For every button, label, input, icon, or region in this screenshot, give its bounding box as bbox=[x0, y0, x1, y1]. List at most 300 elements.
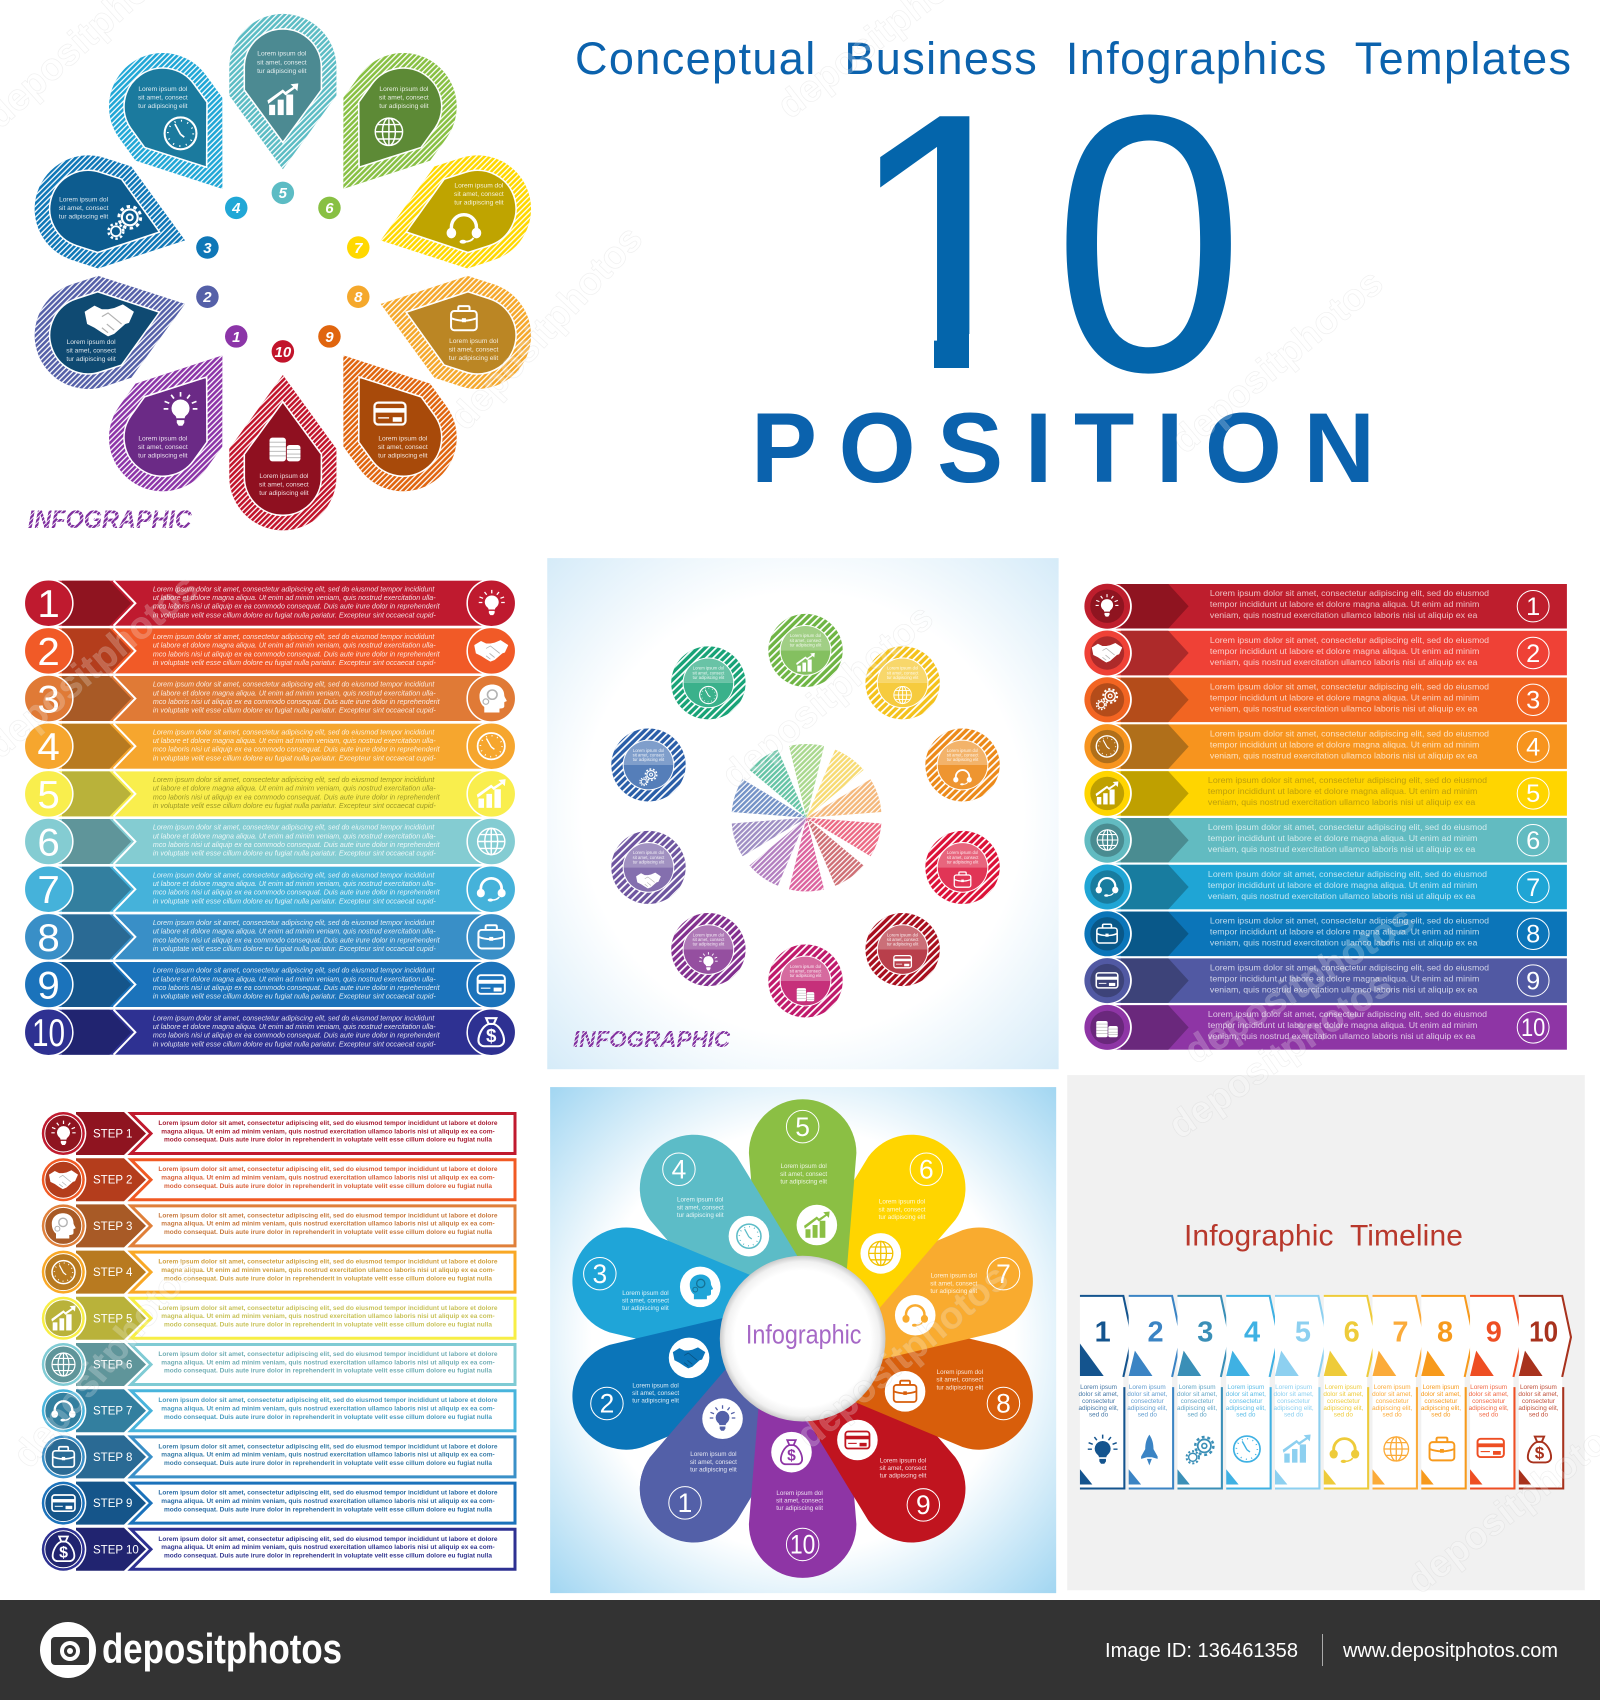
step 3: magna aliqua. Ut enim ad minim veniam, quis nostrud exercitation ullamco laboris nisi ut aliquip ex ea com- bbox=[161, 1221, 495, 1228]
label INFOGRAPHIC: INFOGRAPHIC bbox=[28, 507, 193, 534]
column 5: 5 bbox=[1295, 1317, 1311, 1348]
column 7: dolor sit amet, bbox=[1372, 1391, 1412, 1398]
column 1: dolor sit amet, bbox=[1078, 1391, 1119, 1398]
circle: dark red card: sit amet, consect bbox=[887, 937, 919, 942]
column 8: 8 bbox=[1437, 1317, 1453, 1348]
row 2: veniam, quis nostrud exercitation ullamco laboris nisi ut aliquip ex ea bbox=[1210, 657, 1477, 667]
row 8: veniam, quis nostrud exercitation ullamco laboris nisi ut aliquip ex ea bbox=[1210, 938, 1477, 948]
step 4: magna aliqua. Ut enim ad minim veniam, quis nostrud exercitation ullamco laboris nisi ut aliquip ex ea com- bbox=[161, 1267, 495, 1274]
step 5 bbox=[40, 1295, 515, 1341]
petal text blocks: Lorem ipsum dol bbox=[880, 1457, 926, 1464]
step 5: modo consequat. Duis aute irure dolor in reprehenderit in voluptate velit esse cillum dolore eu fugiat nulla bbox=[164, 1322, 492, 1329]
row 3 bbox=[1084, 676, 1567, 723]
row 3: Lorem ipsum dolor sit amet, consectetur adipiscing elit, sed do eiusmod tempor incididunt bbox=[153, 682, 435, 689]
number labels: 4 bbox=[672, 1154, 686, 1184]
petal 2: Lorem ipsum dol bbox=[67, 339, 116, 346]
row 4: in voluptate velit esse cillum dolore eu fugiat nulla pariatur. Excepteur sint occaecat cupid- bbox=[153, 755, 436, 762]
step 8 bbox=[40, 1434, 515, 1480]
row 4: mco laboris nisi ut aliquip ex ea commodo consequat. Duis aute irure dolor in reprehenderit bbox=[153, 747, 441, 754]
column 10: dolor sit amet, bbox=[1518, 1391, 1559, 1398]
step 6: STEP 6 bbox=[93, 1360, 132, 1372]
row 1: 1 bbox=[37, 583, 60, 626]
panel: big petal flower bbox=[550, 1087, 1056, 1593]
column 2: adipiscing elit, bbox=[1127, 1405, 1168, 1412]
row 7: Lorem ipsum dolor sit amet, consectetur adipiscing elit, sed do eiusmod tempor incididunt bbox=[153, 872, 435, 879]
number labels: 2 bbox=[600, 1389, 614, 1419]
row 10: 10 bbox=[1521, 1014, 1545, 1042]
step 6: Lorem ipsum dolor sit amet, consectetur adipiscing elit, sed do eiusmod tempor incididunt ut labore et dolore bbox=[158, 1351, 498, 1358]
panel: teardrop flower bbox=[21, 14, 545, 534]
column 10: sed do bbox=[1529, 1412, 1549, 1419]
row 5: Lorem ipsum dolor sit amet, consectetur adipiscing elit, sed do eiusmod bbox=[1208, 775, 1487, 785]
watermarks: depositphotos bbox=[714, 596, 941, 797]
petal 2: sit amet, consect bbox=[66, 347, 116, 354]
petal 9: tur adipiscing elit bbox=[378, 452, 428, 459]
petal 1: tur adipiscing elit bbox=[138, 452, 188, 459]
step 1 bbox=[40, 1110, 515, 1156]
column 6: sed do bbox=[1334, 1412, 1353, 1419]
column 9: 9 bbox=[1486, 1317, 1502, 1348]
petal 4: Lorem ipsum dol bbox=[138, 86, 188, 93]
step 5: STEP 5 bbox=[93, 1313, 132, 1325]
column 3 bbox=[1177, 1295, 1230, 1490]
row 4: tempor incididunt ut labore et dolore magna aliqua. Ut enim ad minim bbox=[1210, 739, 1479, 749]
column 4: consectetur bbox=[1229, 1398, 1262, 1405]
row 3: ut labore et dolore magna aliqua. Ut enim ad minim veniam, quis nostrud exercitation ulla- bbox=[153, 690, 436, 697]
row 1 bbox=[24, 580, 516, 627]
number badges: 2 bbox=[202, 289, 212, 306]
column 3: adipiscing elit, bbox=[1177, 1405, 1217, 1412]
row 3: in voluptate velit esse cillum dolore eu fugiat nulla pariatur. Excepteur sint occaecat cupid- bbox=[153, 708, 436, 715]
circle: green clock: Lorem ipsum dol bbox=[693, 666, 724, 671]
row 1: veniam, quis nostrud exercitation ullamco laboris nisi ut aliquip ex ea bbox=[1210, 610, 1477, 620]
petal text blocks: Lorem ipsum dol bbox=[690, 1451, 737, 1458]
column 3: consectetur bbox=[1181, 1398, 1214, 1405]
column 7 bbox=[1372, 1295, 1425, 1490]
row 5: 5 bbox=[1526, 780, 1540, 808]
petal text blocks: sit amet, consect bbox=[930, 1280, 978, 1287]
row 10: tempor incididunt ut labore et dolore magna aliqua. Ut enim ad minim bbox=[1208, 1020, 1477, 1030]
panel: step list bbox=[40, 1110, 515, 1572]
row 3: mco laboris nisi ut aliquip ex ea commodo consequat. Duis aute irure dolor in reprehenderit bbox=[153, 699, 441, 706]
row 1: tempor incididunt ut labore et dolore magna aliqua. Ut enim ad minim bbox=[1210, 599, 1479, 609]
petal text blocks: tur adipiscing elit bbox=[632, 1397, 679, 1404]
column 8: adipiscing elit, bbox=[1421, 1405, 1461, 1412]
row 8: mco laboris nisi ut aliquip ex ea commodo consequat. Duis aute irure dolor in reprehenderit bbox=[153, 937, 441, 944]
step 6: magna aliqua. Ut enim ad minim veniam, quis nostrud exercitation ullamco laboris nisi ut aliquip ex ea com- bbox=[161, 1359, 495, 1366]
petal text blocks: tur adipiscing elit bbox=[690, 1466, 737, 1473]
column 2: Lorem ipsum bbox=[1129, 1384, 1166, 1391]
petal text blocks: tur adipiscing elit bbox=[622, 1305, 669, 1312]
column 5: sed do bbox=[1284, 1412, 1304, 1419]
watermarks: depositphotos bbox=[5, 1248, 205, 1476]
number badges bbox=[196, 182, 370, 363]
step 9: magna aliqua. Ut enim ad minim veniam, quis nostrud exercitation ullamco laboris nisi ut aliquip ex ea com- bbox=[161, 1498, 495, 1505]
petal 10: sit amet, consect bbox=[259, 481, 309, 488]
column 7: adipiscing elit, bbox=[1372, 1405, 1412, 1412]
icon: bulb bbox=[702, 1398, 743, 1439]
column 10: consectetur bbox=[1522, 1398, 1555, 1405]
petal 1: sit amet, consect bbox=[138, 444, 188, 451]
watermarks: depositphotos bbox=[789, 1256, 1016, 1457]
column 6: dolor sit amet, bbox=[1323, 1391, 1364, 1398]
row 8: tempor incididunt ut labore et dolore magna aliqua. Ut enim ad minim bbox=[1210, 927, 1479, 937]
row 9: ut labore et dolore magna aliqua. Ut enim ad minim veniam, quis nostrud exercitation ulla- bbox=[153, 976, 436, 983]
column 9: Lorem ipsum bbox=[1470, 1384, 1507, 1391]
icon: globe bbox=[860, 1233, 901, 1274]
petal text blocks: tur adipiscing elit bbox=[776, 1505, 823, 1512]
circle: red briefcase bbox=[925, 831, 1000, 904]
column 8: Lorem ipsum bbox=[1422, 1384, 1459, 1391]
number labels: 1 bbox=[678, 1488, 692, 1518]
row 9: 9 bbox=[1526, 968, 1540, 995]
row 4: 4 bbox=[37, 726, 60, 769]
row 9: tempor incididunt ut labore et dolore magna aliqua. Ut enim ad minim bbox=[1210, 973, 1479, 983]
step 3: modo consequat. Duis aute irure dolor in reprehenderit in voluptate velit esse cillum dolore eu fugiat nulla bbox=[164, 1229, 492, 1236]
step 10: modo consequat. Duis aute irure dolor in reprehenderit in voluptate velit esse cillum dolore eu fugiat nulla bbox=[164, 1553, 492, 1560]
step 9: STEP 9 bbox=[93, 1498, 132, 1510]
petal 9 bbox=[300, 324, 478, 513]
icon: briefcase bbox=[885, 1371, 925, 1412]
step 2: modo consequat. Duis aute irure dolor in reprehenderit in voluptate velit esse cillum dolore eu fugiat nulla bbox=[164, 1183, 492, 1190]
column 10: 10 bbox=[1529, 1317, 1558, 1348]
row 6: in voluptate velit esse cillum dolore eu fugiat nulla pariatur. Excepteur sint occaecat cupid- bbox=[153, 851, 436, 858]
row 6: veniam, quis nostrud exercitation ullamco laboris nisi ut aliquip ex ea bbox=[1208, 844, 1475, 854]
row 6: Lorem ipsum dolor sit amet, consectetur adipiscing elit, sed do eiusmod bbox=[1208, 822, 1487, 832]
petal 6: sit amet, consect bbox=[379, 95, 429, 102]
row 10: ut labore et dolore magna aliqua. Ut enim ad minim veniam, quis nostrud exercitation ulla- bbox=[153, 1024, 436, 1031]
step 6 bbox=[40, 1342, 515, 1388]
number badges: 4 bbox=[231, 200, 241, 217]
circle: yellow globe bbox=[865, 646, 940, 719]
circle: yellow globe: tur adipiscing elit bbox=[887, 675, 919, 680]
circle: green chart: tur adipiscing elit bbox=[790, 643, 822, 648]
row 9: Lorem ipsum dolor sit amet, consectetur adipiscing elit, sed do eiusmod tempor incididunt bbox=[153, 968, 435, 975]
column 10 bbox=[1518, 1295, 1571, 1490]
row 2: in voluptate velit esse cillum dolore eu fugiat nulla pariatur. Excepteur sint occaecat cupid- bbox=[153, 660, 436, 667]
row 5: veniam, quis nostrud exercitation ullamco laboris nisi ut aliquip ex ea bbox=[1208, 797, 1475, 807]
step 8: modo consequat. Duis aute irure dolor in reprehenderit in voluptate velit esse cillum dolore eu fugiat nulla bbox=[164, 1460, 492, 1467]
row 5: tempor incididunt ut labore et dolore magna aliqua. Ut enim ad minim bbox=[1208, 786, 1477, 796]
row 7: in voluptate velit esse cillum dolore eu fugiat nulla pariatur. Excepteur sint occaecat cupid- bbox=[153, 898, 436, 905]
watermarks: depositphotos bbox=[442, 218, 651, 438]
row 1: Lorem ipsum dolor sit amet, consectetur adipiscing elit, sed do eiusmod bbox=[1210, 588, 1489, 598]
icon: handshake bbox=[669, 1338, 709, 1378]
circle: green chart: sit amet, consect bbox=[790, 638, 822, 643]
step 4: Lorem ipsum dolor sit amet, consectetur adipiscing elit, sed do eiusmod tempor incididunt ut labore et dolore bbox=[158, 1259, 498, 1266]
row 8 bbox=[1084, 910, 1567, 957]
row 2: Lorem ipsum dolor sit amet, consectetur adipiscing elit, sed do eiusmod bbox=[1210, 635, 1489, 645]
row 6 bbox=[1084, 817, 1567, 864]
row 4 bbox=[1084, 723, 1567, 770]
column 2 bbox=[1127, 1295, 1181, 1490]
row 4: Lorem ipsum dolor sit amet, consectetur adipiscing elit, sed do eiusmod bbox=[1210, 728, 1489, 738]
step 10: magna aliqua. Ut enim ad minim veniam, quis nostrud exercitation ullamco laboris nisi ut aliquip ex ea com- bbox=[161, 1544, 495, 1551]
circle: yellow globe: sit amet, consect bbox=[887, 670, 919, 675]
row 8: ut labore et dolore magna aliqua. Ut enim ad minim veniam, quis nostrud exercitation ulla- bbox=[153, 929, 436, 936]
column 4: Lorem ipsum bbox=[1227, 1384, 1264, 1391]
column 1: adipiscing elit, bbox=[1078, 1405, 1119, 1412]
column 1: 1 bbox=[1095, 1317, 1111, 1348]
petal text blocks bbox=[622, 1163, 984, 1512]
row 4 bbox=[24, 723, 516, 770]
row 8: 8 bbox=[37, 916, 60, 960]
column 8 bbox=[1421, 1295, 1474, 1490]
centre hub: Infographic bbox=[746, 1320, 861, 1350]
circle: blue gears: Lorem ipsum dol bbox=[633, 748, 664, 753]
circle: dark red card: tur adipiscing elit bbox=[887, 942, 919, 947]
watermarks: depositphotos bbox=[1178, 898, 1422, 1073]
row 4: veniam, quis nostrud exercitation ullamco laboris nisi ut aliquip ex ea bbox=[1210, 750, 1477, 760]
row 5 bbox=[24, 770, 516, 817]
row 10: in voluptate velit esse cillum dolore eu fugiat nulla pariatur. Excepteur sint occaecat cupid- bbox=[153, 1041, 436, 1048]
circle: red briefcase: Lorem ipsum dol bbox=[947, 850, 978, 855]
footer bar bbox=[0, 1600, 1600, 1700]
petal 7 bbox=[364, 141, 545, 291]
column 1: consectetur bbox=[1082, 1398, 1115, 1405]
circle: green chart: Lorem ipsum dol bbox=[790, 633, 821, 638]
row 3: veniam, quis nostrud exercitation ullamco laboris nisi ut aliquip ex ea bbox=[1210, 704, 1477, 714]
column 5: Lorem ipsum bbox=[1275, 1384, 1312, 1391]
column 10: adipiscing elit, bbox=[1518, 1405, 1559, 1412]
step 6: modo consequat. Duis aute irure dolor in reprehenderit in voluptate velit esse cillum dolore eu fugiat nulla bbox=[164, 1368, 492, 1375]
circle: violet handshake: sit amet, consect bbox=[633, 855, 665, 860]
row 7: Lorem ipsum dolor sit amet, consectetur adipiscing elit, sed do eiusmod bbox=[1208, 869, 1487, 879]
circle: dark red card: Lorem ipsum dol bbox=[887, 932, 918, 937]
step 7: modo consequat. Duis aute irure dolor in reprehenderit in voluptate velit esse cillum dolore eu fugiat nulla bbox=[164, 1414, 492, 1421]
petal 7: tur adipiscing elit bbox=[454, 200, 504, 207]
petal 6: tur adipiscing elit bbox=[379, 103, 429, 110]
row 9: mco laboris nisi ut aliquip ex ea commodo consequat. Duis aute irure dolor in reprehenderit bbox=[153, 985, 441, 992]
circle: blue gears bbox=[611, 728, 686, 801]
number badges: 5 bbox=[279, 185, 288, 202]
petals bbox=[558, 1099, 1047, 1578]
step 3: STEP 3 bbox=[93, 1221, 132, 1233]
watermarks: depositphotos bbox=[1164, 261, 1391, 462]
circle: orange headset: Lorem ipsum dol bbox=[947, 748, 978, 753]
row 4: ut labore et dolore magna aliqua. Ut enim ad minim veniam, quis nostrud exercitation ulla- bbox=[153, 738, 436, 745]
column 6 bbox=[1323, 1295, 1376, 1490]
row 8: Lorem ipsum dolor sit amet, consectetur adipiscing elit, sed do eiusmod bbox=[1210, 916, 1489, 926]
step 10: STEP 10 bbox=[93, 1544, 139, 1556]
circle: magenta coins: sit amet, consect bbox=[790, 969, 822, 973]
step 7: magna aliqua. Ut enim ad minim veniam, quis nostrud exercitation ullamco laboris nisi ut aliquip ex ea com- bbox=[161, 1405, 495, 1412]
watermarks: depositphotos bbox=[1161, 963, 1400, 1147]
number badges: 6 bbox=[325, 200, 334, 217]
number labels bbox=[592, 1112, 1011, 1560]
row 5: ut labore et dolore magna aliqua. Ut enim ad minim veniam, quis nostrud exercitation ulla- bbox=[153, 786, 436, 793]
column 3: dolor sit amet, bbox=[1177, 1391, 1217, 1398]
icon: clock bbox=[729, 1216, 769, 1256]
circle: purple bulb: tur adipiscing elit bbox=[693, 942, 725, 947]
circle: violet handshake: Lorem ipsum dol bbox=[633, 850, 664, 855]
step 10 bbox=[40, 1526, 515, 1572]
petal 4: tur adipiscing elit bbox=[138, 103, 188, 110]
column 6: adipiscing elit, bbox=[1323, 1405, 1364, 1412]
step 9 bbox=[40, 1480, 515, 1526]
row 1: in voluptate velit esse cillum dolore eu fugiat nulla pariatur. Excepteur sint occaecat cupid- bbox=[153, 612, 436, 619]
row 2 bbox=[1084, 630, 1567, 676]
row 6: ut labore et dolore magna aliqua. Ut enim ad minim veniam, quis nostrud exercitation ulla- bbox=[153, 833, 436, 840]
petal text blocks: sit amet, consect bbox=[776, 1497, 823, 1504]
timeline title: Infographic Timeline bbox=[1184, 1220, 1463, 1252]
row 3: 3 bbox=[1526, 687, 1540, 715]
website: www.depositphotos.com bbox=[1342, 1640, 1558, 1662]
row 7: 7 bbox=[1526, 874, 1540, 902]
circle: green clock: sit amet, consect bbox=[693, 670, 725, 675]
row 6: Lorem ipsum dolor sit amet, consectetur adipiscing elit, sed do eiusmod tempor incididunt bbox=[153, 825, 435, 832]
number labels: 8 bbox=[996, 1389, 1011, 1419]
number badges: 10 bbox=[275, 344, 292, 361]
step 5: Lorem ipsum dolor sit amet, consectetur adipiscing elit, sed do eiusmod tempor incididunt ut labore et dolore bbox=[158, 1305, 498, 1312]
petal numbers bbox=[584, 1110, 1020, 1561]
column 8: sed do bbox=[1431, 1412, 1451, 1419]
column 9: dolor sit amet, bbox=[1469, 1391, 1509, 1398]
petal text blocks: Lorem ipsum dol bbox=[776, 1490, 823, 1497]
petal text blocks: sit amet, consect bbox=[632, 1390, 679, 1397]
column 6: Lorem ipsum bbox=[1325, 1384, 1362, 1391]
number labels: 9 bbox=[916, 1490, 931, 1520]
petal 9: Lorem ipsum dol bbox=[378, 435, 428, 442]
row 2: Lorem ipsum dolor sit amet, consectetur adipiscing elit, sed do eiusmod tempor incididunt bbox=[153, 634, 435, 641]
petal 3: Lorem ipsum dol bbox=[59, 196, 109, 203]
circle: green chart bbox=[768, 614, 843, 687]
column 9: consectetur bbox=[1472, 1398, 1505, 1405]
icon: chart bbox=[797, 1205, 837, 1245]
row 2 bbox=[24, 627, 516, 674]
column 5: dolor sit amet, bbox=[1274, 1391, 1314, 1398]
row 6: mco laboris nisi ut aliquip ex ea commodo consequat. Duis aute irure dolor in reprehenderit bbox=[153, 842, 441, 849]
row 2: 2 bbox=[1526, 640, 1540, 668]
step 3: Lorem ipsum dolor sit amet, consectetur adipiscing elit, sed do eiusmod tempor incididunt ut labore et dolore bbox=[158, 1212, 498, 1219]
row 7 bbox=[24, 866, 516, 913]
petal 7: sit amet, consect bbox=[454, 191, 504, 198]
petal text blocks: tur adipiscing elit bbox=[879, 1214, 926, 1221]
column 3: Lorem ipsum bbox=[1179, 1384, 1216, 1391]
circle: magenta coins: tur adipiscing elit bbox=[790, 973, 822, 978]
number badges: 3 bbox=[203, 240, 212, 257]
step 7: STEP 7 bbox=[93, 1406, 132, 1418]
logo text: depositphotos bbox=[102, 1625, 342, 1672]
row 1: mco laboris nisi ut aliquip ex ea commodo consequat. Duis aute irure dolor in reprehenderit bbox=[153, 604, 441, 611]
circle: orange headset bbox=[925, 728, 1000, 801]
row 9: in voluptate velit esse cillum dolore eu fugiat nulla pariatur. Excepteur sint occaecat cupid- bbox=[153, 994, 436, 1001]
row 2: mco laboris nisi ut aliquip ex ea commodo consequat. Duis aute irure dolor in reprehenderit bbox=[153, 651, 441, 658]
petal 2: tur adipiscing elit bbox=[66, 356, 116, 363]
step 1: magna aliqua. Ut enim ad minim veniam, quis nostrud exercitation ullamco laboris nisi ut aliquip ex ea com- bbox=[161, 1128, 495, 1135]
petal 4 bbox=[88, 32, 266, 220]
circle: blue gears: sit amet, consect bbox=[633, 753, 665, 757]
petal 1 bbox=[88, 324, 266, 513]
circle: orange headset: sit amet, consect bbox=[947, 753, 979, 757]
petal 5 bbox=[229, 14, 336, 169]
column 5: adipiscing elit, bbox=[1274, 1405, 1314, 1412]
step 2 bbox=[40, 1157, 515, 1203]
circle: violet handshake: tur adipiscing elit bbox=[633, 860, 665, 865]
column 9 bbox=[1469, 1295, 1523, 1490]
centre hub bbox=[720, 1256, 886, 1421]
petal text blocks: Lorem ipsum dol bbox=[677, 1197, 723, 1204]
step 4 bbox=[40, 1249, 515, 1295]
circle: purple bulb: Lorem ipsum dol bbox=[693, 932, 724, 937]
petal 5: Lorem ipsum dol bbox=[257, 51, 307, 58]
striped pie chart bbox=[730, 744, 883, 891]
row 5: Lorem ipsum dolor sit amet, consectetur adipiscing elit, sed do eiusmod tempor incididunt bbox=[153, 777, 435, 784]
row 9 bbox=[1084, 957, 1567, 1004]
petal 8: Lorem ipsum dol bbox=[449, 338, 499, 345]
petal text blocks: Lorem ipsum dol bbox=[622, 1290, 669, 1297]
petal 8: sit amet, consect bbox=[449, 346, 499, 353]
row 6: 6 bbox=[1526, 827, 1540, 855]
number badges: 1 bbox=[232, 329, 240, 346]
petal 10: Lorem ipsum dol bbox=[259, 473, 309, 480]
row 9: veniam, quis nostrud exercitation ullamco laboris nisi ut aliquip ex ea bbox=[1210, 984, 1477, 994]
step 4: STEP 4 bbox=[93, 1267, 133, 1279]
circle: blue gears: tur adipiscing elit bbox=[633, 757, 665, 762]
big number 10: 0 bbox=[1053, 39, 1244, 448]
petal text blocks: Lorem ipsum dol bbox=[632, 1382, 679, 1389]
row 1: 1 bbox=[1526, 593, 1540, 621]
petal text blocks: tur adipiscing elit bbox=[937, 1384, 983, 1391]
step 1: modo consequat. Duis aute irure dolor in reprehenderit in voluptate velit esse cillum dolore eu fugiat nulla bbox=[164, 1137, 492, 1144]
petal 1: Lorem ipsum dol bbox=[138, 435, 188, 442]
row 2: ut labore et dolore magna aliqua. Ut enim ad minim veniam, quis nostrud exercitation ulla- bbox=[153, 643, 436, 650]
petal text blocks: sit amet, consect bbox=[880, 1465, 927, 1472]
row 1: ut labore et dolore magna aliqua. Ut enim ad minim veniam, quis nostrud exercitation ulla- bbox=[153, 595, 436, 602]
petal 5: tur adipiscing elit bbox=[257, 68, 307, 75]
row 3: tempor incididunt ut labore et dolore magna aliqua. Ut enim ad minim bbox=[1210, 693, 1479, 703]
circle: purple bulb: sit amet, consect bbox=[693, 937, 725, 942]
row 9: 9 bbox=[37, 964, 60, 1007]
circle: purple bulb bbox=[671, 913, 746, 986]
column 3: sed do bbox=[1188, 1412, 1207, 1419]
icon: head bbox=[680, 1267, 721, 1307]
column 2: dolor sit amet, bbox=[1127, 1391, 1168, 1398]
petal 7: Lorem ipsum dol bbox=[454, 182, 504, 189]
column 8: consectetur bbox=[1424, 1398, 1457, 1405]
petal text blocks: tur adipiscing elit bbox=[880, 1473, 927, 1480]
circle: magenta coins bbox=[768, 944, 843, 1018]
panel: numbered list with right icons bbox=[24, 580, 516, 1056]
column 5 bbox=[1274, 1295, 1328, 1490]
step 1: Lorem ipsum dolor sit amet, consectetur adipiscing elit, sed do eiusmod tempor incididunt ut labore et dolore bbox=[158, 1120, 498, 1127]
petal text blocks: Lorem ipsum dol bbox=[937, 1369, 983, 1376]
petal 3: sit amet, consect bbox=[59, 205, 109, 212]
petal text blocks: Lorem ipsum dol bbox=[931, 1273, 977, 1280]
column 6: consectetur bbox=[1327, 1398, 1360, 1405]
step 5: magna aliqua. Ut enim ad minim veniam, quis nostrud exercitation ullamco laboris nisi ut aliquip ex ea com- bbox=[161, 1313, 495, 1320]
circle: magenta coins: Lorem ipsum dol bbox=[790, 964, 821, 969]
number labels: 5 bbox=[795, 1112, 810, 1142]
row 8: in voluptate velit esse cillum dolore eu fugiat nulla pariatur. Excepteur sint occaecat cupid- bbox=[153, 946, 436, 953]
column 2: 2 bbox=[1148, 1317, 1164, 1348]
circle: yellow globe: Lorem ipsum dol bbox=[887, 666, 918, 671]
column 3: 3 bbox=[1197, 1317, 1213, 1348]
petal 8 bbox=[364, 253, 545, 403]
column 8: dolor sit amet, bbox=[1421, 1391, 1461, 1398]
row 6: tempor incididunt ut labore et dolore magna aliqua. Ut enim ad minim bbox=[1208, 833, 1477, 843]
column 6: 6 bbox=[1344, 1317, 1360, 1348]
row 5: 5 bbox=[37, 773, 60, 817]
row 10: Lorem ipsum dolor sit amet, consectetur adipiscing elit, sed do eiusmod tempor incididunt bbox=[153, 1015, 435, 1022]
circle: red briefcase: tur adipiscing elit bbox=[947, 860, 979, 865]
number badges: 7 bbox=[354, 240, 363, 257]
step 2: STEP 2 bbox=[93, 1175, 132, 1187]
petal 2 bbox=[21, 253, 202, 403]
petal text blocks: tur adipiscing elit bbox=[780, 1178, 827, 1185]
step 7: Lorem ipsum dolor sit amet, consectetur adipiscing elit, sed do eiusmod tempor incididunt ut labore et dolore bbox=[158, 1397, 498, 1404]
row 3: Lorem ipsum dolor sit amet, consectetur adipiscing elit, sed do eiusmod bbox=[1210, 682, 1489, 692]
